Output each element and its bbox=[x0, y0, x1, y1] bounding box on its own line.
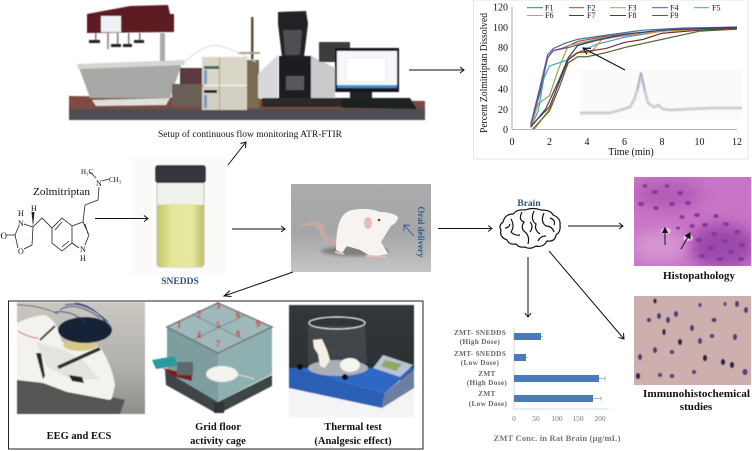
arrow: rat to brain bbox=[438, 226, 492, 232]
label: Grid floor activity cage bbox=[190, 422, 246, 447]
x axis ticks: 200 bbox=[594, 414, 606, 423]
legend: F4 bbox=[670, 4, 678, 12]
arrow: brain to bar chart bbox=[525, 257, 531, 317]
panel: dissolution chart bbox=[474, 0, 748, 159]
legend: F9 bbox=[670, 11, 678, 20]
x tick labels: 4 bbox=[584, 137, 590, 148]
atom labels: N bbox=[96, 179, 102, 188]
bar chart: ZMT concentration in rat brain bbox=[454, 328, 621, 443]
category labels: (High Dose) bbox=[460, 338, 500, 346]
curves F1 to F9 bbox=[531, 27, 737, 129]
cage position numbers: 3 bbox=[216, 301, 221, 311]
label: Immunohistochemical studies: studies bbox=[680, 401, 713, 413]
legend bbox=[527, 4, 720, 20]
panel: immunohistochemistry image bbox=[634, 296, 751, 385]
panel: histopathology image bbox=[632, 177, 752, 268]
cage position numbers: 2 bbox=[197, 309, 202, 319]
computer tower bbox=[319, 42, 350, 62]
label: EEG and ECS: EEG and ECS bbox=[47, 431, 112, 442]
atom labels: N bbox=[80, 245, 86, 254]
arrow: vial to setup bbox=[228, 142, 246, 165]
arrow: oral delivery bbox=[404, 225, 414, 236]
inset spectrum bbox=[580, 70, 742, 120]
legend: F3 bbox=[628, 4, 636, 12]
arrow: brain to histopathology bbox=[568, 223, 623, 229]
category labels: (Low Dose) bbox=[469, 400, 507, 408]
y tick labels: 100 bbox=[493, 23, 508, 34]
label: Immunohistochemical studies: Immunohistochemical bbox=[643, 388, 750, 400]
legend: F7 bbox=[587, 11, 595, 20]
panel: behavioural tests box bbox=[8, 301, 423, 449]
atom labels bbox=[0, 168, 122, 263]
atom labels: N bbox=[18, 219, 24, 228]
spectrometer bbox=[258, 11, 342, 107]
bars bbox=[514, 333, 599, 402]
photo: thermal test bbox=[289, 305, 414, 417]
y tick labels: 40 bbox=[498, 84, 508, 96]
arrow: molecule to vial bbox=[95, 216, 148, 222]
label: Zolmitriptan: Zolmitriptan bbox=[33, 186, 91, 198]
x tick labels bbox=[510, 137, 742, 148]
monitor and keyboard bbox=[335, 48, 417, 109]
atom labels: O bbox=[0, 231, 8, 241]
arrow: brain to immunohistochemistry bbox=[549, 251, 624, 339]
y tick labels: 20 bbox=[498, 105, 508, 116]
x tick labels: 10 bbox=[694, 137, 704, 148]
label: Immunohistochemical studies bbox=[643, 388, 750, 413]
atom labels: H₃C bbox=[81, 168, 93, 176]
x axis ticks: 50 bbox=[532, 414, 540, 423]
cage position numbers bbox=[177, 301, 261, 349]
icon: SNEDDS vial bbox=[133, 157, 226, 275]
x tick labels: 0 bbox=[510, 137, 514, 148]
arrow: rat to behaviour box bbox=[224, 272, 293, 296]
panel: ATR-FTIR equipment photo bbox=[69, 5, 425, 120]
x axis ticks bbox=[512, 414, 606, 423]
y tick labels: 0 bbox=[503, 125, 508, 136]
legend: F8 bbox=[628, 11, 636, 20]
label: Grid floor activity cage: Grid floor bbox=[195, 422, 241, 433]
cage position numbers: 4 bbox=[197, 330, 202, 340]
dissolution apparatus bbox=[77, 5, 185, 106]
label: Thermal test: Thermal test bbox=[324, 422, 382, 433]
label: Thermal test: (Analgesic effect) bbox=[314, 436, 392, 447]
molecule: zolmitriptan structure bbox=[0, 168, 122, 263]
y axis title: Percent Zolmitriptan Dissolved bbox=[479, 13, 490, 133]
category labels: ZMT bbox=[478, 390, 496, 398]
legend: F5 bbox=[712, 4, 720, 12]
x axis ticks: 100 bbox=[551, 414, 563, 423]
legend: F2 bbox=[587, 4, 595, 12]
y tick labels bbox=[493, 2, 508, 136]
x tick labels: 2 bbox=[547, 137, 552, 148]
y tick labels: 60 bbox=[498, 64, 508, 75]
label: Grid floor activity cage: activity cage bbox=[190, 436, 246, 447]
panel: rat photo bbox=[291, 184, 431, 272]
arrow: vial to rat bbox=[232, 226, 285, 232]
atom labels: H bbox=[18, 209, 24, 218]
legend: F1 bbox=[545, 4, 553, 12]
cage position numbers: 6 bbox=[236, 310, 241, 320]
atom labels: CH₃ bbox=[109, 176, 122, 184]
label: Thermal test bbox=[314, 422, 392, 447]
caption: setup: Setup of continuous flow monitoring ATR-FTIR bbox=[158, 129, 343, 140]
category labels: ZMT bbox=[478, 370, 496, 378]
inset pointer arrow bbox=[583, 48, 625, 70]
category labels: (Low Dose) bbox=[461, 359, 499, 367]
atom labels: H bbox=[80, 254, 86, 263]
label: Histopathology: Histopathology bbox=[663, 270, 735, 282]
y tick labels: 80 bbox=[498, 43, 508, 54]
x axis ticks: 150 bbox=[572, 414, 584, 423]
x tick labels: 8 bbox=[660, 137, 664, 148]
x axis title: Time (min) bbox=[608, 147, 654, 158]
error bars bbox=[526, 336, 605, 400]
cage position numbers: 8 bbox=[236, 329, 241, 339]
legend: F6 bbox=[545, 11, 553, 20]
label: oral delivery: Oral delivery bbox=[416, 206, 426, 258]
cage position numbers: 7 bbox=[216, 339, 221, 349]
photo: EEG and ECS bbox=[17, 302, 145, 414]
axes bbox=[512, 7, 737, 129]
bench bbox=[69, 96, 425, 110]
cage position numbers: 9 bbox=[256, 319, 261, 329]
category labels: ZMT- SNEDDS bbox=[454, 350, 506, 358]
category labels: (High Dose) bbox=[467, 379, 507, 387]
icon: brain bbox=[500, 208, 560, 248]
y tick labels: 120 bbox=[493, 2, 508, 14]
atom labels: O bbox=[18, 247, 24, 256]
x axis ticks: 0 bbox=[512, 414, 516, 423]
x tick labels: 6 bbox=[622, 137, 627, 148]
cage position numbers: 1 bbox=[177, 320, 182, 330]
illustration: grid floor activity cage bbox=[152, 301, 272, 413]
x axis title: ZMT Conc. in Rat Brain (μg/mL) bbox=[494, 433, 621, 443]
arrow: equipment to dissolution chart bbox=[409, 67, 464, 73]
label: SNEDDS: SNEDDS bbox=[161, 277, 199, 287]
category labels bbox=[454, 329, 507, 408]
arrows on tissue bbox=[662, 228, 668, 245]
pump modules bbox=[172, 17, 260, 110]
atom labels: H bbox=[31, 204, 37, 213]
cage position numbers: 5 bbox=[216, 320, 221, 330]
x tick labels: 12 bbox=[732, 137, 742, 148]
category labels: ZMT- SNEDDS bbox=[454, 329, 506, 337]
label: Brain: Brain bbox=[517, 199, 541, 209]
